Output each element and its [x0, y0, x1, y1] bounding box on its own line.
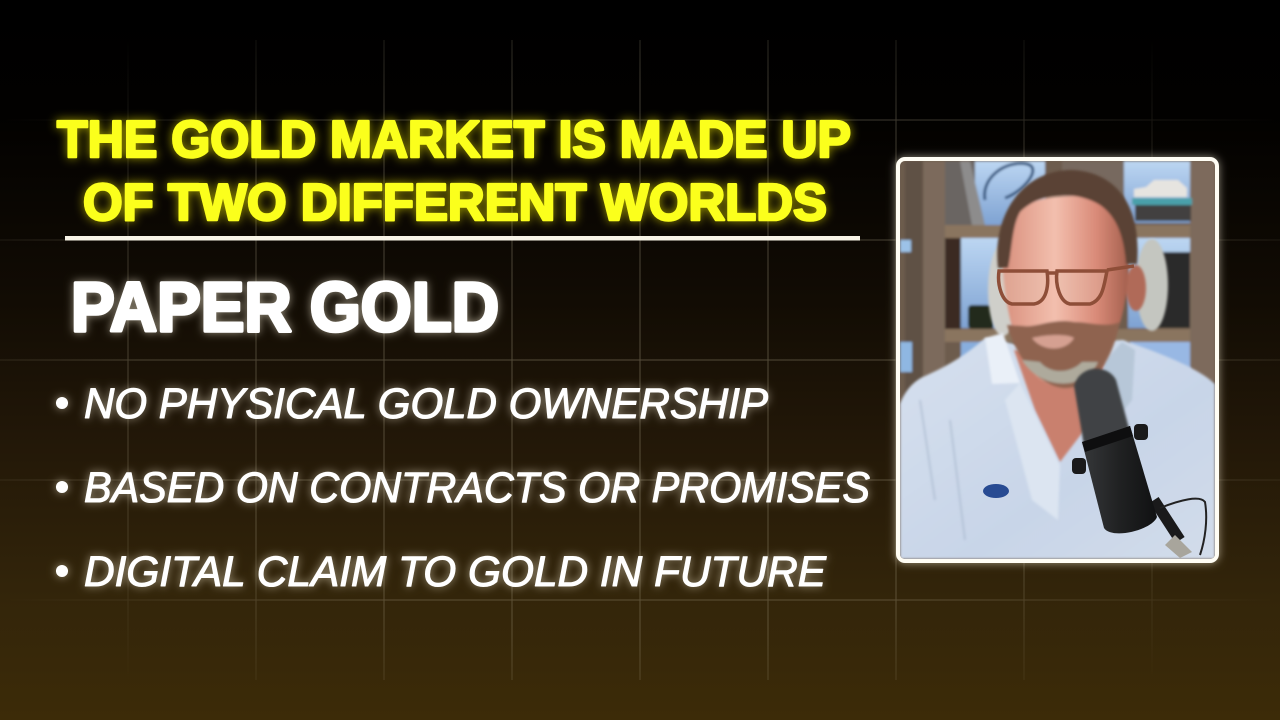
bullet list: [56, 380, 870, 596]
collar and neck: [920, 333, 1135, 540]
shirt: [900, 338, 1215, 559]
glasses: [999, 266, 1134, 304]
title underline: [65, 236, 860, 240]
microphone: [1072, 369, 1206, 558]
shirt logo: [983, 484, 1009, 498]
bookshelf background: [900, 161, 1215, 559]
presenter photo panel: [898, 159, 1217, 561]
title: OF TWO DIFFERENT WORLDS: [83, 174, 827, 232]
headphones: [988, 239, 1168, 336]
title: THE GOLD MARKET IS MADE UP: [57, 111, 851, 169]
bullet 3: DIGITAL CLAIM TO GOLD IN FUTURE: [84, 548, 827, 596]
head and hair: [997, 170, 1146, 388]
title: [57, 111, 851, 232]
bullet 1: NO PHYSICAL GOLD OWNERSHIP: [84, 380, 768, 428]
heading: paper gold: PAPER GOLD: [71, 268, 499, 346]
bullet 2: BASED ON CONTRACTS OR PROMISES: [84, 464, 870, 512]
